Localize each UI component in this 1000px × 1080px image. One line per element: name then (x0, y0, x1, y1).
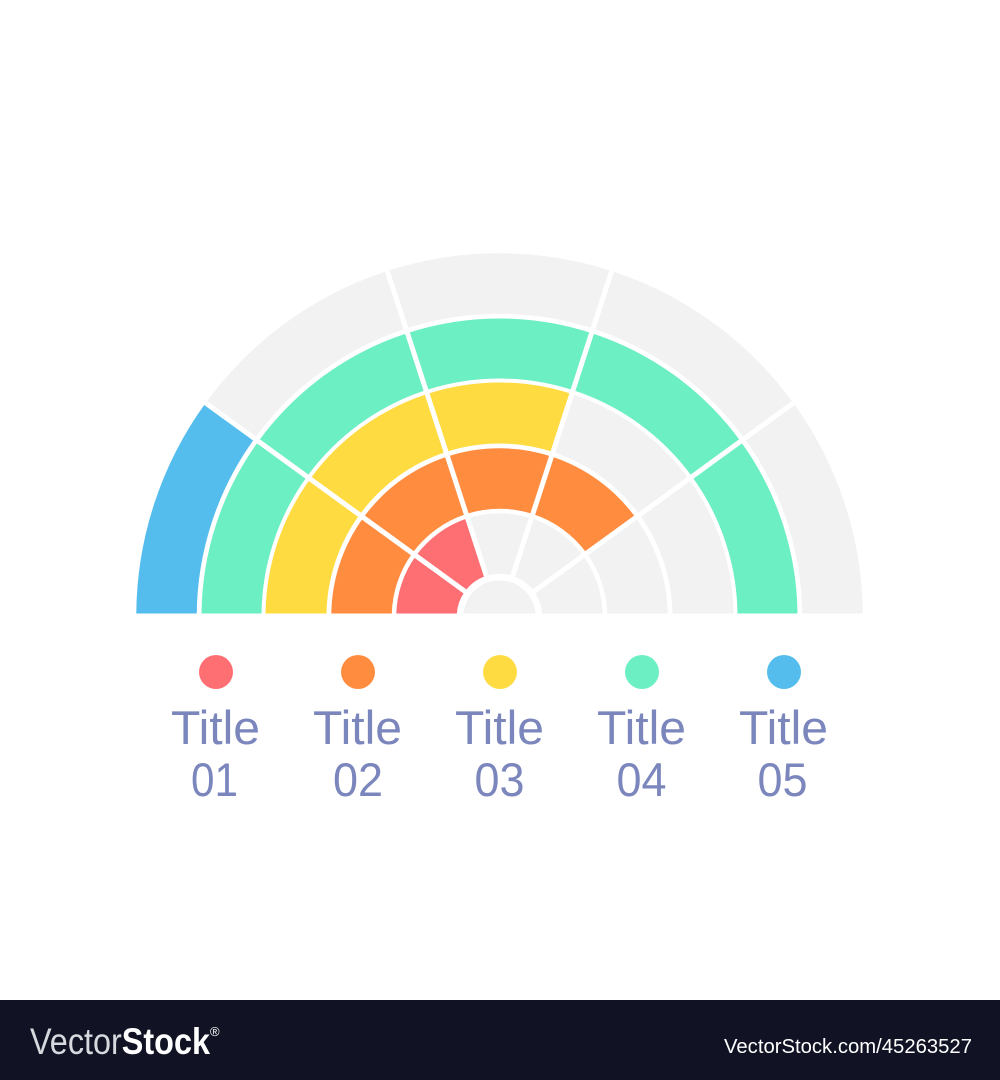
ring 1: red ring (426, 543, 572, 616)
legend item 04: 04 (616, 753, 666, 806)
center hub (464, 580, 536, 614)
footer logo: VectorStock (30, 1021, 210, 1062)
legend item 03 (455, 655, 544, 806)
legend item 02: Title (313, 701, 402, 754)
legend item 05: 05 (758, 753, 808, 806)
ring 4: green ring (232, 349, 768, 616)
footer bar (0, 1000, 1000, 1080)
ring 5: blue and grey outer ring (166, 284, 832, 616)
legend item 05: Title (739, 701, 828, 754)
legend item 03: Title (455, 701, 544, 754)
registered mark: ® (210, 1024, 220, 1039)
legend item 02: 02 (333, 753, 383, 806)
legend item 03: 03 (474, 753, 524, 806)
legend item 01 (171, 655, 260, 806)
legend item 01: 01 (191, 753, 238, 806)
legend item 01: Title (171, 701, 260, 754)
legend item 04 (597, 655, 686, 806)
ring 3: yellow ring (296, 413, 703, 616)
legend item 02 (313, 655, 402, 806)
semicircular ring chart (166, 267, 832, 655)
footer url: VectorStock.com/45263527 (724, 1036, 972, 1058)
legend item 04: Title (597, 701, 686, 754)
ring 2: orange ring (362, 478, 638, 616)
legend item 05 (739, 655, 828, 806)
